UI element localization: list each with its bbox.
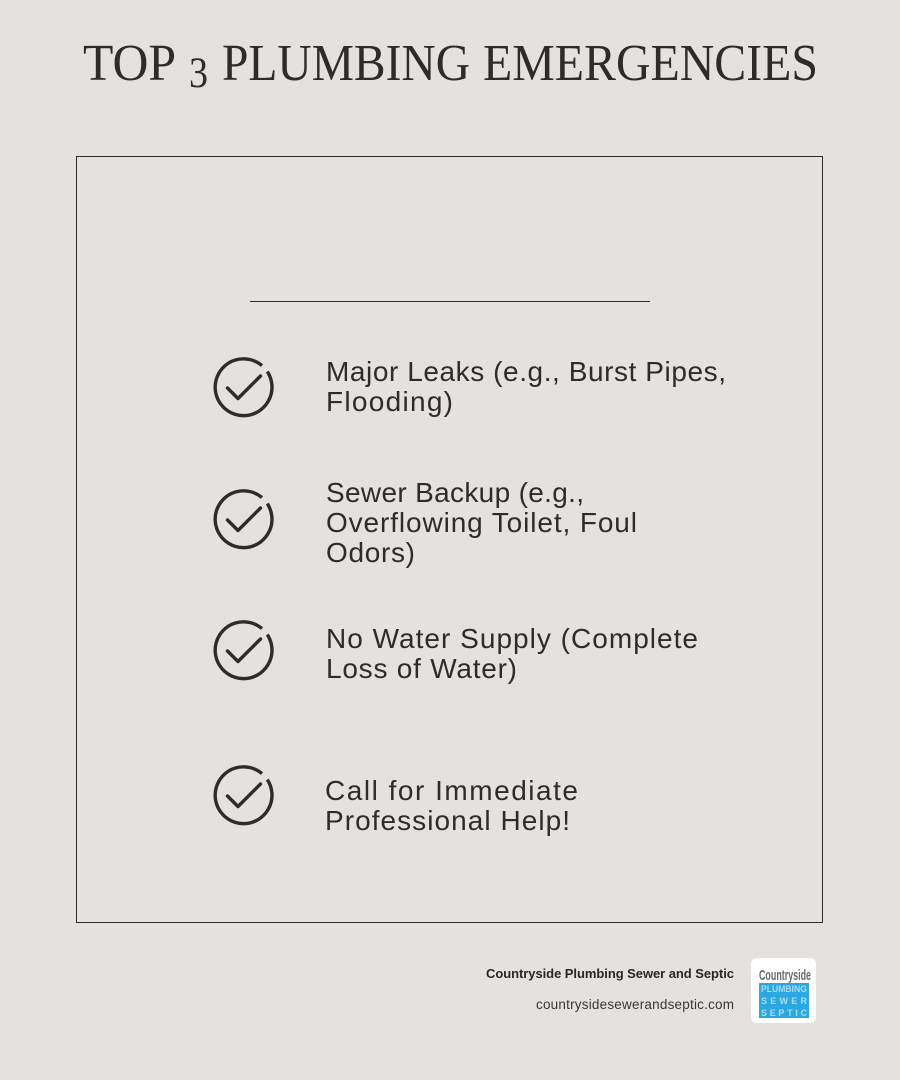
logo: SEWER	[761, 996, 808, 1006]
title	[83, 35, 818, 97]
logo: PLUMBING	[761, 984, 807, 994]
title: EMERGENCIES	[483, 35, 818, 92]
title: 3	[189, 50, 208, 97]
title: PLUMBING	[222, 35, 470, 92]
logo: Countryside	[759, 967, 811, 984]
logo: SEPTIC	[761, 1008, 808, 1018]
footer website: countrysidesewerandseptic.com	[536, 997, 734, 1012]
footer company name: Countryside Plumbing Sewer and Septic	[486, 966, 734, 981]
item 2 text: Odors)	[326, 537, 415, 568]
item 4 text: Call for Immediate	[325, 775, 578, 806]
item 3 text: No Water Supply (Complete	[326, 623, 698, 654]
icon: check mark 3	[215, 622, 272, 679]
item 1 text: Flooding)	[326, 386, 453, 417]
logo	[751, 958, 816, 1023]
title: TOP	[83, 35, 176, 92]
panel: emergency list	[76, 156, 822, 922]
item 3 text: Loss of Water)	[326, 653, 517, 684]
item 1 text: Major Leaks (e.g., Burst Pipes,	[326, 356, 726, 387]
icon: check mark 2	[215, 491, 272, 548]
item 2 text: Sewer Backup (e.g.,	[326, 477, 584, 508]
item 2 text: Overflowing Toilet, Foul	[326, 507, 637, 538]
icon: check mark 4	[215, 767, 272, 824]
icon: check mark 1	[215, 359, 272, 416]
item 4 text: Professional Help!	[325, 805, 570, 836]
